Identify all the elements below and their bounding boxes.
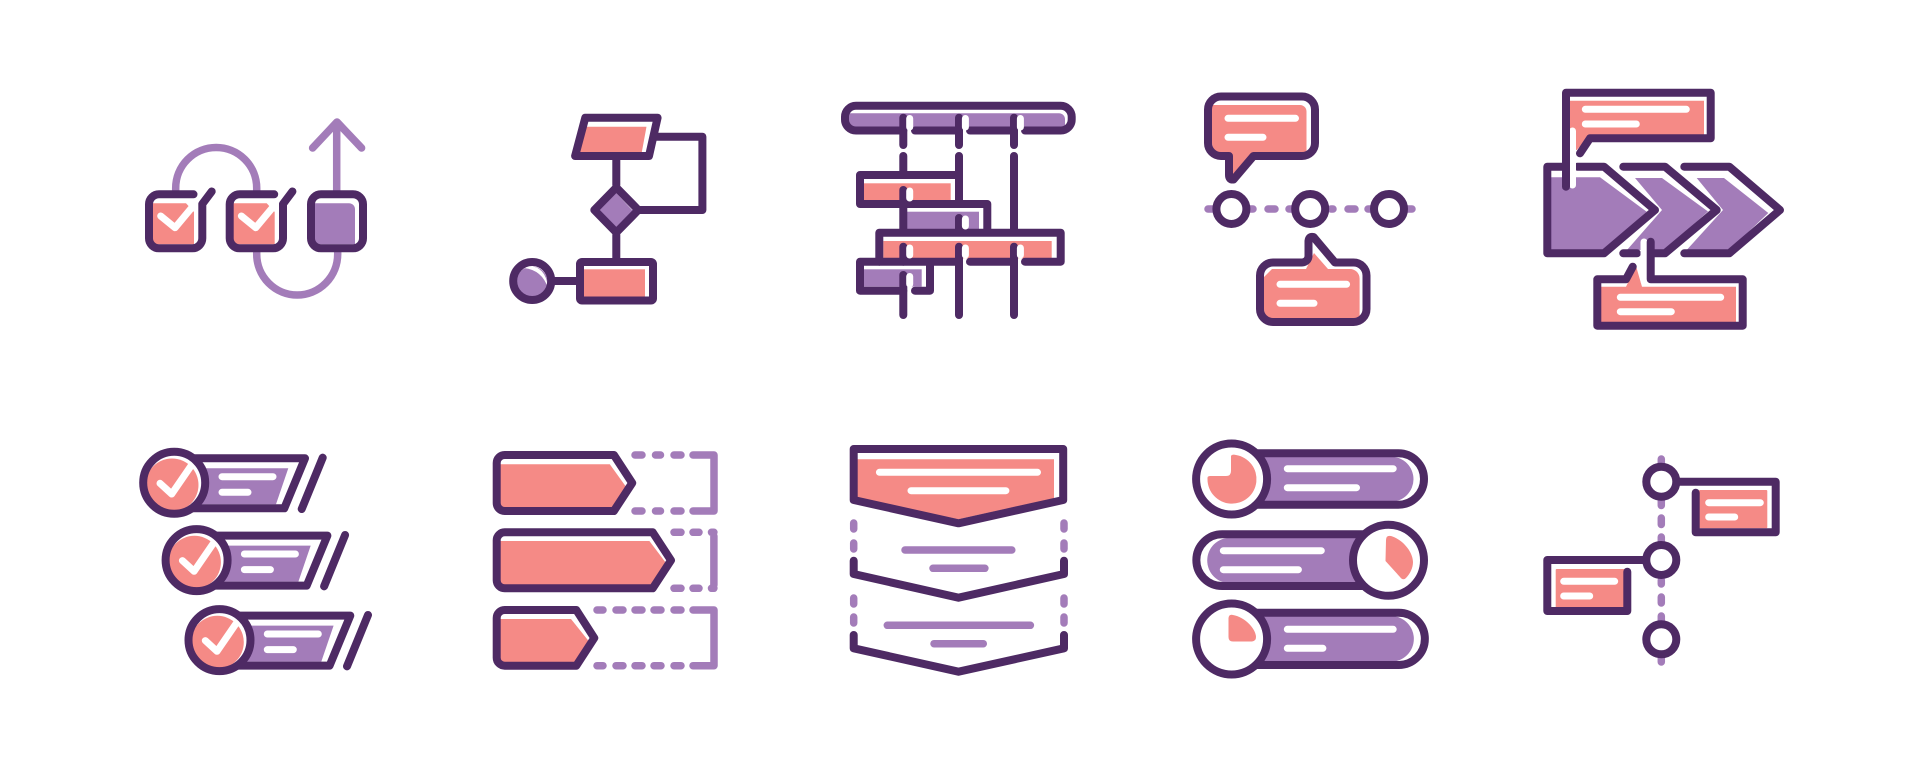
- pill two: [1196, 525, 1424, 596]
- checked box one: [149, 192, 212, 248]
- progress bar three: [497, 610, 714, 666]
- icon: gantt chart: [845, 106, 1072, 315]
- icon: stacked chevron list: [854, 449, 1064, 672]
- top filled section: [854, 449, 1063, 523]
- rectangle node: [580, 262, 653, 300]
- top callout: [1566, 93, 1711, 187]
- chevron fills: [1550, 177, 1768, 250]
- icon: progress arrows: [497, 455, 714, 666]
- connector lines: [555, 137, 702, 281]
- task bars fills: [864, 183, 1052, 287]
- dotted line: [1208, 205, 1412, 213]
- diamond node: [594, 188, 638, 232]
- icon: pie progress pills: [1196, 444, 1425, 674]
- timeline nodes: [1216, 194, 1404, 224]
- icon: checklist items: [143, 452, 368, 671]
- top speech bubble: [1208, 96, 1315, 180]
- connector arcs and arrow: [176, 122, 362, 295]
- item two: [166, 529, 345, 591]
- icon: checklist steps with arrow: [149, 122, 363, 295]
- note right: [1677, 482, 1776, 532]
- circle node: [513, 262, 551, 300]
- timeline verticals: [903, 118, 1020, 315]
- item one: [143, 452, 323, 514]
- second outlined section: [854, 523, 1064, 598]
- icon: chevron process with callouts: [1547, 93, 1780, 326]
- task bars outlines: [860, 156, 1061, 291]
- timeline nodes: [1646, 467, 1676, 654]
- chevron outlines: [1547, 167, 1780, 253]
- parallelogram node: [575, 118, 658, 156]
- dotted line: [1658, 459, 1665, 662]
- third outlined section: [854, 598, 1064, 672]
- purple box: [311, 194, 363, 248]
- item three: [188, 609, 368, 671]
- pill one: [1196, 444, 1424, 514]
- note left: [1547, 560, 1645, 611]
- header bar: [845, 106, 1072, 130]
- icon: flowchart: [513, 118, 702, 300]
- bottom speech bubble: [1260, 237, 1366, 322]
- checked box two: [230, 192, 292, 248]
- progress bar two: [497, 532, 714, 588]
- pill three: [1196, 604, 1425, 674]
- icon: timeline with speech bubbles: [1208, 96, 1412, 322]
- progress bar one: [497, 455, 714, 511]
- bottom callout: [1597, 242, 1743, 326]
- icon: vertical timeline with notes: [1547, 459, 1776, 662]
